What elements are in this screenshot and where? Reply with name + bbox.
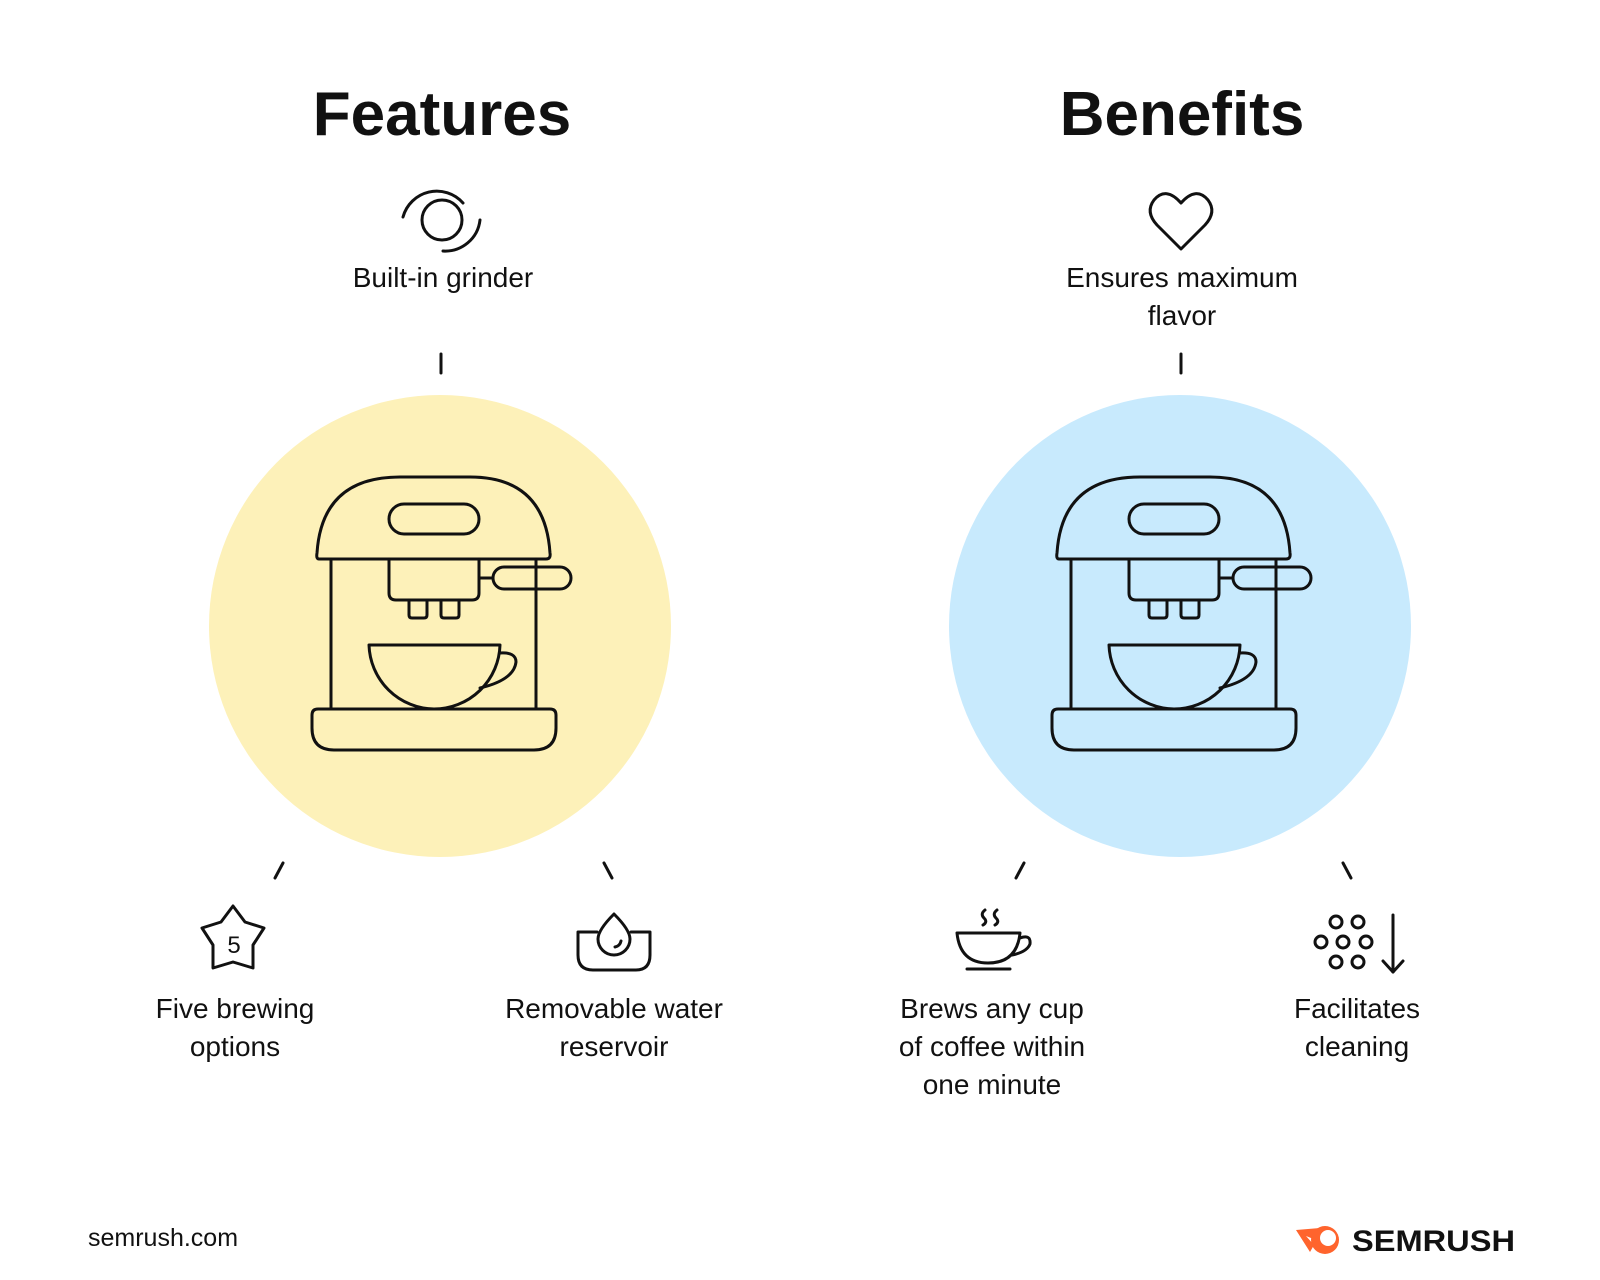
icon: water reservoir [578, 914, 650, 970]
text: Brews any cup of coffee within one minute: Brews any cup [900, 993, 1084, 1024]
circle: features [209, 395, 671, 857]
icon: grinder [403, 191, 480, 251]
icon: steaming cup [957, 910, 1030, 969]
icon: heart [1150, 194, 1212, 249]
text: Five brewing options: options [190, 1031, 280, 1062]
text: Facilitates cleaning: Facilitates [1294, 993, 1420, 1024]
circle: benefits [949, 395, 1411, 857]
icon: star 5 [202, 906, 264, 968]
illustration: coffee machine (features) [312, 477, 571, 750]
connector ticks [275, 354, 1351, 878]
title: Benefits: Benefits [1060, 80, 1304, 149]
text: Built-in grinder: Built-in grinder [353, 262, 533, 293]
title: Features: Features [313, 80, 571, 149]
text: Five brewing options: Five brewing [156, 993, 314, 1024]
text: Brews any cup of coffee within one minute: of coffee within [899, 1031, 1085, 1062]
logo: SEMRUSH [1296, 1225, 1515, 1258]
text: Removable water reservoir: reservoir [560, 1031, 668, 1062]
text: Facilitates cleaning: cleaning [1305, 1031, 1409, 1062]
logo: SEMRUSH: SEMRUSH [1352, 1225, 1515, 1258]
text: Ensures maximum flavor: flavor [1148, 300, 1216, 331]
icon: star 5: 5 [227, 932, 241, 959]
illustration: coffee machine (benefits) [1052, 477, 1311, 750]
text: Removable water reservoir: Removable water [505, 993, 723, 1024]
footer: semrush.com: semrush.com [88, 1224, 238, 1252]
text: Ensures maximum flavor: Ensures maximum [1066, 262, 1298, 293]
icon: dots with down arrow [1315, 915, 1403, 972]
text: Brews any cup of coffee within one minute: one minute [923, 1069, 1061, 1100]
